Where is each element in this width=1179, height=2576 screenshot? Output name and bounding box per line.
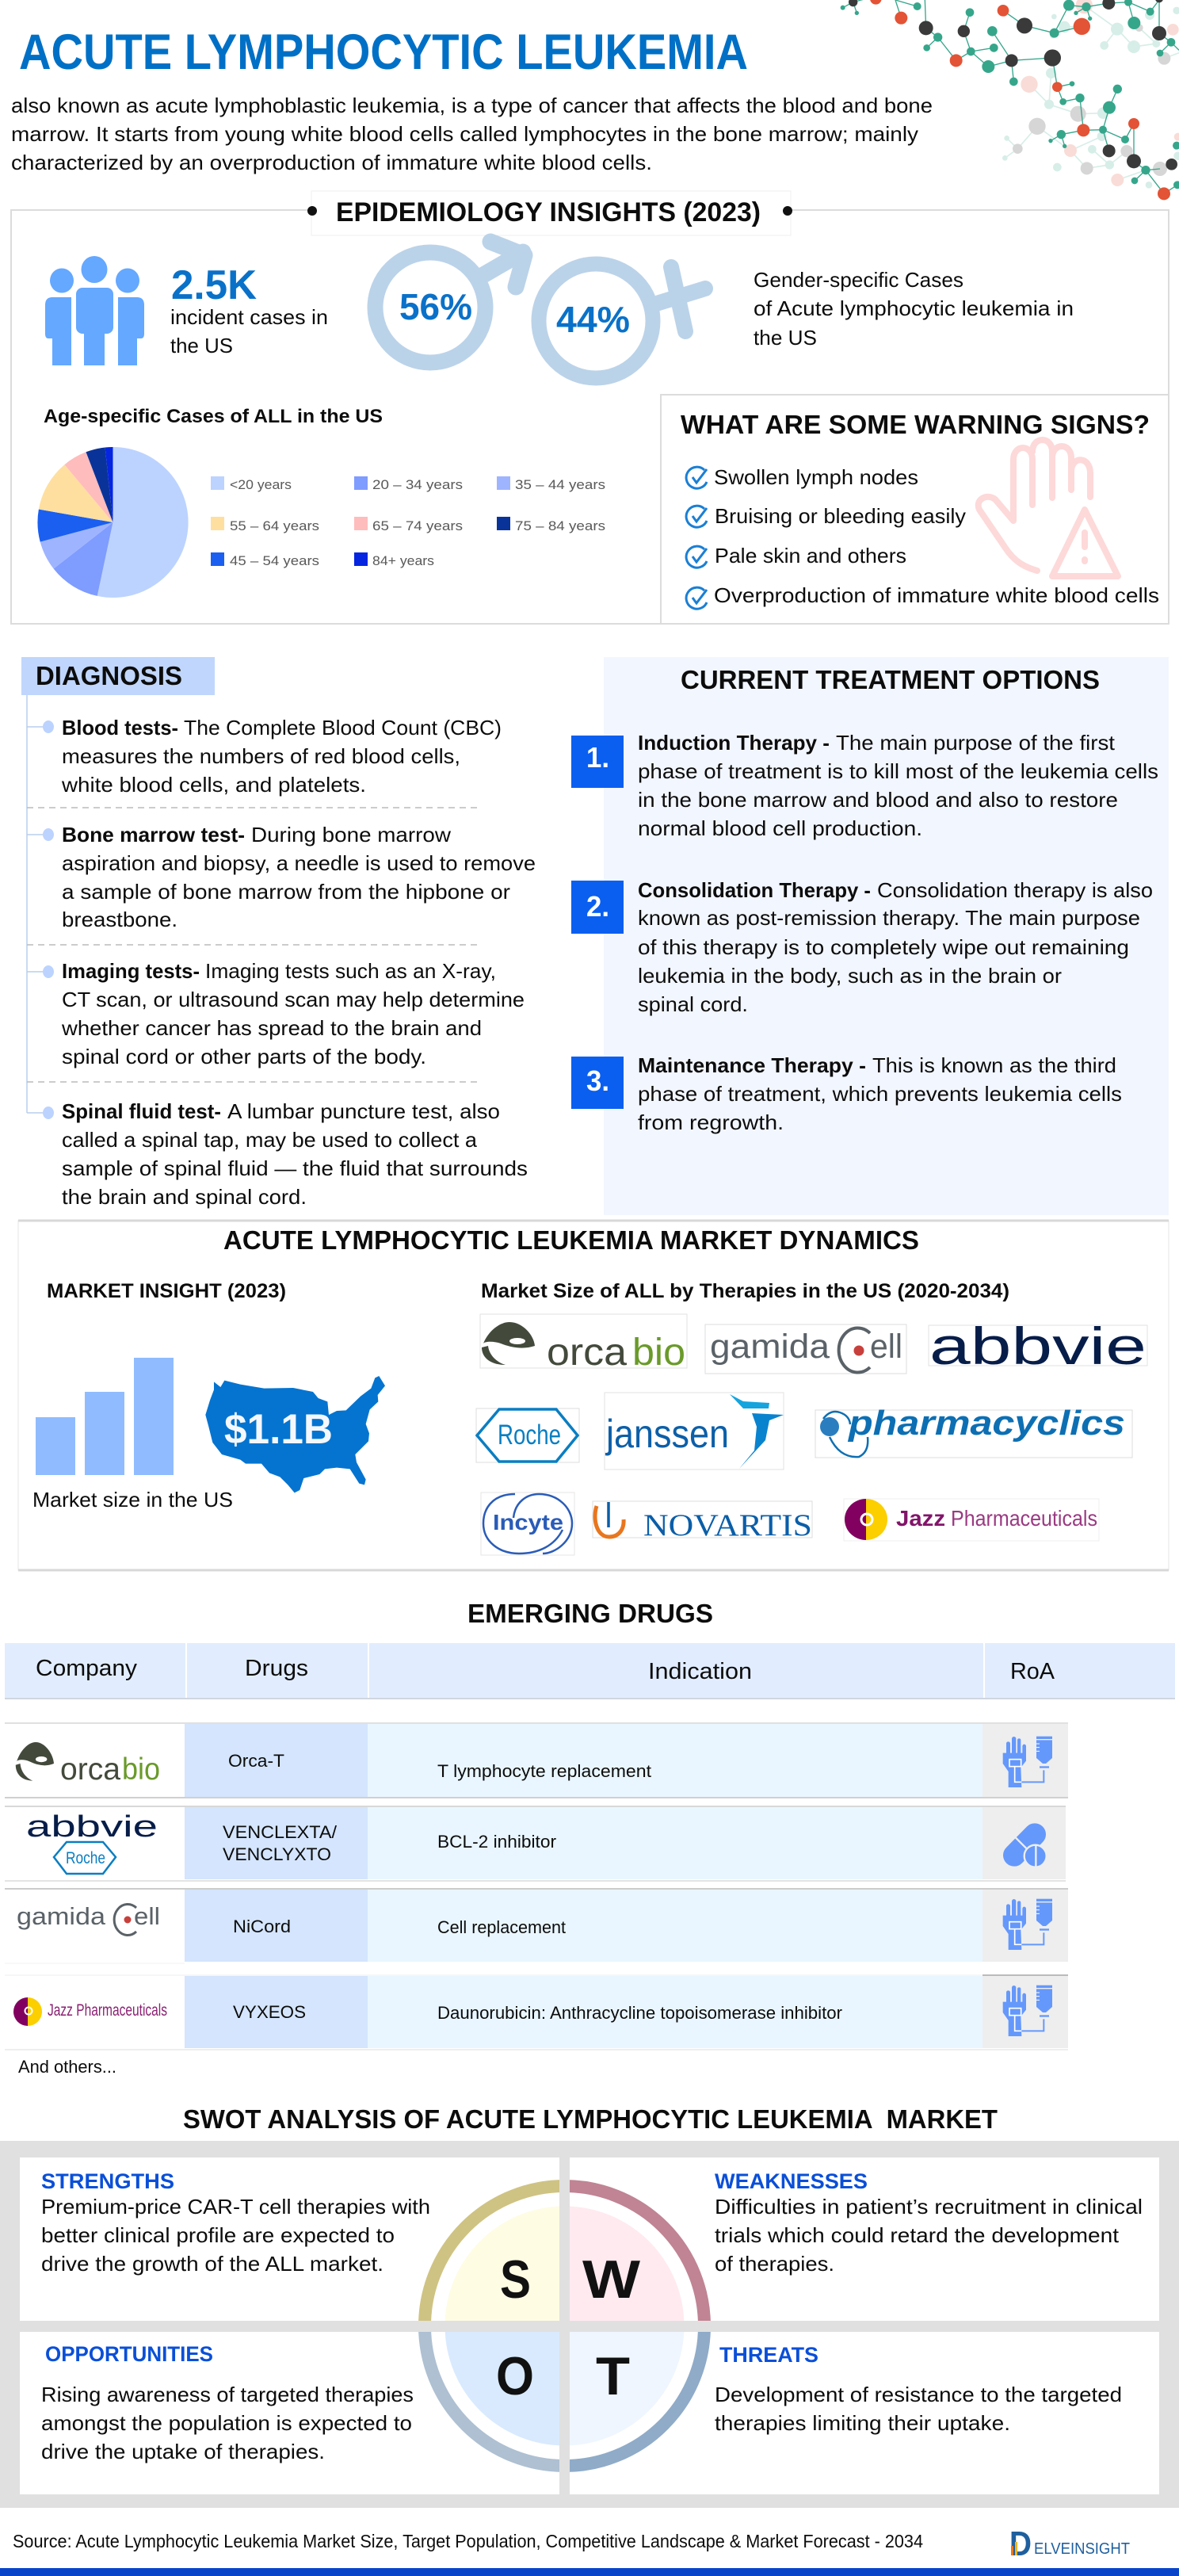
pie chart legend: 55 – 64 years [230, 518, 319, 533]
diagnosis: imaging tests: CT scan, or ultrasound scan may help determine [62, 988, 525, 1011]
pie chart legend: 65 – 74 years [372, 518, 463, 533]
warning sign list: Bruising or bleeding easily [715, 504, 966, 528]
logo: novartis: NOVARTIS [643, 1508, 812, 1542]
SWOT: opportunities: OPPORTUNITIES [45, 2342, 213, 2366]
SWOT circle diagram: T [596, 2346, 630, 2406]
diagnosis: blood tests [61, 716, 502, 797]
table row: nicord [5, 1889, 1068, 1963]
treatment 3: maintenance: 3. [586, 1064, 609, 1097]
icon: pills [1014, 1834, 1047, 1867]
treatment 2: consolidation: 2. [586, 890, 609, 923]
treatment heading: CURRENT TREATMENT OPTIONS [681, 665, 1100, 694]
diagnosis: spinal fluid test: sample of spinal fluid — the fluid that surrounds [62, 1156, 528, 1180]
table header row: Drugs [245, 1656, 308, 1681]
intro text: characterized by an overproduction of immature white blood cells. [11, 151, 652, 174]
logo: jazz pharmaceuticals small [13, 1997, 167, 2026]
treatment 2: consolidation: spinal cord. [638, 992, 748, 1016]
SWOT: opportunities: drive the uptake of therapies. [41, 2440, 325, 2463]
intro text: marrow. It starts from young white blood cells called lymphocytes in the bone marrow; mainly [11, 122, 918, 146]
therapies heading: Market Size of ALL by Therapies in the US (2020-2034) [481, 1280, 1009, 1302]
stat: incident cases [170, 262, 328, 357]
source note: Source: Acute Lymphocytic Leukemia Market Size, Target Population, Competitive Landscape & Market Forecast - 2034 [13, 2531, 923, 2551]
treatment 1: induction: The main purpose of the first [836, 731, 1116, 755]
table row: venclexta: VENCLEXTA/ [223, 1822, 338, 1842]
SWOT: opportunities: Rising awareness of targeted therapies [41, 2383, 414, 2406]
and others note: And others... [18, 2057, 116, 2077]
diagnosis: bone marrow test: During bone marrow [251, 823, 451, 847]
epidemiology heading: EPIDEMIOLOGY INSIGHTS (2023) [336, 197, 761, 227]
diagnosis: imaging tests: Imaging tests such as an X-ray, [205, 959, 496, 983]
panel: SWOT [0, 2141, 1179, 2508]
SWOT: strengths: STRENGTHS [41, 2169, 174, 2193]
diagnosis: imaging tests: whether cancer has spread to the brain and [61, 1016, 482, 1040]
SWOT: weaknesses: trials which could retard the development [715, 2223, 1120, 2247]
logo: roche: Roche [498, 1420, 561, 1450]
panel: diagnosis [21, 657, 536, 1209]
table row: orca-t [5, 1723, 1068, 1798]
diagnosis: spinal fluid test: A lumbar puncture test, also [227, 1099, 500, 1123]
treatment 3: maintenance: from regrowth. [638, 1110, 784, 1134]
SWOT: weaknesses [715, 2169, 1143, 2276]
diagnosis: spinal fluid test: called a spinal tap, may be used to collect a [62, 1128, 478, 1152]
icon: IV infusion [1003, 1737, 1052, 1787]
logo: abbvie: abbvie [929, 1317, 1147, 1375]
US map with market value [205, 1376, 385, 1492]
stat: incident cases: 2.5K [171, 262, 257, 308]
market insight heading: MARKET INSIGHT (2023) [47, 1280, 286, 1302]
logo: orcabio [480, 1314, 687, 1374]
market dynamics heading: ACUTE LYMPHOCYTIC LEUKEMIA MARKET DYNAMICS [223, 1225, 919, 1255]
pie chart legend: 20 – 34 years [372, 477, 463, 492]
SWOT circle diagram: W [582, 2249, 641, 2310]
heading: emerging drugs: EMERGING DRUGS [467, 1599, 713, 1628]
diagnosis: spinal fluid test: Spinal fluid test- [62, 1099, 221, 1123]
diagnosis: blood tests: white blood cells, and platelets. [61, 773, 366, 797]
table row: vyxeos [5, 1975, 1068, 2050]
treatment 2: consolidation: Consolidation Therapy - [638, 878, 871, 902]
table header row: Company [36, 1656, 138, 1681]
logo: pharmacyclics: pharmacyclics [848, 1404, 1125, 1443]
diagnosis: bone marrow test: Bone marrow test- [62, 823, 245, 847]
logo: orcabio small: bio [122, 1752, 160, 1787]
logo: janssen [605, 1393, 784, 1470]
logo: orcabio: bio [632, 1332, 685, 1374]
warning sign list: Pale skin and others [715, 544, 906, 568]
pie chart legend: 84+ years [372, 553, 434, 568]
age chart heading: Age-specific Cases of ALL in the US [44, 406, 383, 427]
logo: orcabio small [16, 1742, 160, 1787]
table row: vyxeos: Daunorubicin: Anthracycline topoisomerase inhibitor [437, 2003, 842, 2023]
table header row: RoA [1010, 1659, 1055, 1684]
treatment 1: induction: phase of treatment is to kill most of the leukemia cells [638, 759, 1158, 783]
SWOT: opportunities: amongst the population is expected to [41, 2411, 412, 2435]
icon: female symbol 44% [539, 264, 705, 378]
market size caption: Market size in the US [32, 1488, 233, 1512]
logo: incyte: Incyte [493, 1510, 563, 1535]
SWOT: strengths: drive the growth of the ALL market. [41, 2252, 383, 2276]
warning sign list [686, 465, 1159, 609]
warning signs heading: WHAT ARE SOME WARNING SIGNS? [681, 410, 1150, 439]
SWOT circle diagram: S [500, 2249, 531, 2310]
table: emerging drugs [5, 1641, 1175, 2050]
treatment 1: induction: 1. [586, 741, 609, 774]
diagnosis: bone marrow test [62, 823, 536, 931]
title: ACUTE LYMPHOCYTIC LEUKEMIA [19, 25, 748, 80]
diagnosis: blood tests: The Complete Blood Count (CBC) [184, 716, 502, 740]
panel: epidemiology insights [11, 191, 1169, 624]
pie chart legend: <20 years [230, 477, 292, 492]
icon: female symbol 44%: 44% [556, 299, 630, 340]
decorative molecule network [841, 0, 1179, 200]
diagnosis heading [21, 657, 215, 695]
diagnosis: imaging tests [61, 959, 525, 1068]
table row: orca-t: T lymphocyte replacement [437, 1761, 651, 1781]
SWOT: weaknesses: of therapies. [715, 2252, 834, 2276]
table row: orca-t: Orca-T [228, 1751, 284, 1771]
diagnosis: imaging tests: spinal cord or other parts of the body. [62, 1045, 426, 1068]
SWOT circle diagram [0, 2157, 1179, 2494]
stat: incident cases: the US [170, 334, 233, 357]
SWOT: strengths: better clinical profile are expected to [41, 2223, 395, 2247]
SWOT: opportunities [41, 2342, 414, 2463]
diagnosis: blood tests: Blood tests- [62, 716, 178, 740]
diagnosis: blood tests: measures the numbers of red blood cells, [62, 744, 460, 768]
treatment 1: induction: Induction Therapy - [638, 731, 830, 755]
logo: pharmacyclics [815, 1404, 1132, 1458]
icon: IV infusion [1003, 1986, 1052, 2036]
footer bar [0, 2568, 1179, 2576]
logo: jazz pharmaceuticals small: Jazz Pharmaceuticals [48, 2001, 167, 2020]
diagnosis heading: DIAGNOSIS [36, 661, 182, 690]
logo: jazz pharmaceuticals: Pharmaceuticals [951, 1506, 1097, 1531]
intro text [11, 94, 933, 174]
diagnosis: bone marrow test: a sample of bone marrow from the hipbone or [62, 880, 510, 904]
gender-specific caption: Gender-specific Cases [754, 268, 963, 292]
table row: nicord: Cell replacement [437, 1917, 566, 1937]
logo: gamida cell [705, 1324, 906, 1374]
logo: roche small [54, 1842, 116, 1874]
US map with market value: $1.1B [224, 1406, 333, 1453]
heading: SWOT analysis: SWOT ANALYSIS OF ACUTE LYMPHOCYTIC LEUKEMIA MARKET [183, 2104, 998, 2134]
SWOT: weaknesses: Difficulties in patient’s recruitment in clinical [715, 2195, 1143, 2219]
treatment 3: maintenance: Maintenance Therapy - [638, 1053, 866, 1077]
icon: bar chart [36, 1358, 174, 1475]
diagnosis: bone marrow test: breastbone. [62, 908, 177, 931]
logo: gamida cell small [17, 1902, 160, 1936]
pie chart legend [211, 476, 605, 568]
table row: venclexta: VENCLYXTO [223, 1844, 331, 1864]
SWOT: threats: THREATS [719, 2343, 818, 2367]
table header row: Indication [648, 1659, 752, 1684]
treatment 3: maintenance: This is known as the third [872, 1053, 1116, 1077]
diagnosis: imaging tests: Imaging tests- [62, 959, 200, 983]
logo: orcabio: orca [547, 1332, 627, 1374]
logo: gamida cell: ell [870, 1328, 902, 1366]
intro text: also known as acute lymphoblastic leukemia, is a type of cancer that affects the blood and bone [11, 94, 933, 117]
logo: abbvie small: abbvie [26, 1810, 158, 1844]
logo: gamida cell small: gamida [17, 1902, 106, 1930]
treatment 1: induction: in the bone marrow and blood and also to restore [638, 788, 1118, 812]
logo: DelveInsight [1009, 2524, 1130, 2563]
logo: jazz pharmaceuticals [844, 1499, 1099, 1541]
table row: nicord: NiCord [233, 1917, 291, 1936]
treatment 2: consolidation: Consolidation therapy is also [877, 878, 1153, 902]
treatment 2: consolidation: known as post-remission therapy. The main purpose [638, 906, 1140, 930]
epidemiology heading [307, 191, 792, 235]
pie chart legend: 45 – 54 years [230, 553, 319, 568]
gender-specific caption [754, 268, 1074, 350]
table header row [5, 1641, 1175, 1699]
SWOT circle diagram: O [496, 2346, 534, 2406]
pie chart legend: 75 – 84 years [515, 518, 605, 533]
logo: orcabio small: orca [60, 1752, 120, 1787]
pie chart legend: 35 – 44 years [515, 477, 605, 492]
gender-specific caption: of Acute lymphocytic leukemia in [754, 296, 1074, 320]
icon: male symbol 56% [376, 242, 525, 363]
SWOT: threats: therapies limiting their uptake. [715, 2411, 1010, 2435]
logo: DelveInsight: ELVEINSIGHT [1034, 2540, 1130, 2558]
logo: roche [476, 1408, 579, 1462]
icon: hand and warning triangle [979, 440, 1118, 576]
warning sign list: Overproduction of immature white blood cells [714, 583, 1159, 607]
SWOT: weaknesses: WEAKNESSES [715, 2169, 868, 2193]
treatment 3: maintenance: phase of treatment, which prevents leukemia cells [638, 1082, 1122, 1106]
logo: jazz pharmaceuticals: Jazz [896, 1506, 945, 1531]
diagnosis: bone marrow test: aspiration and biopsy, a needle is used to remove [62, 851, 536, 875]
logo: gamida cell: gamida [710, 1328, 830, 1366]
pie chart: age-specific cases [37, 447, 189, 598]
panel: warning signs [661, 395, 1169, 624]
logo: roche small: Roche [66, 1849, 105, 1867]
table row: vyxeos: VYXEOS [233, 2002, 306, 2022]
panel: current treatment options [571, 657, 1169, 1215]
logo: novartis [593, 1501, 812, 1542]
treatment 1: induction: normal blood cell production. [638, 816, 922, 840]
icon: IV infusion [1003, 1899, 1052, 1950]
treatment 3: maintenance [571, 1053, 1122, 1134]
SWOT: threats: Development of resistance to the targeted [715, 2383, 1122, 2406]
SWOT: strengths: Premium-price CAR-T cell therapies with [41, 2195, 430, 2219]
logo: DelveInsight: D [1009, 2524, 1032, 2563]
warning sign list: Swollen lymph nodes [714, 465, 918, 489]
stat: incident cases: incident cases in [170, 305, 328, 329]
SWOT: threats [715, 2343, 1122, 2435]
diagnosis: spinal fluid test [62, 1099, 528, 1209]
treatment 2: consolidation: leukemia in the body, such as in the brain or [638, 964, 1062, 988]
logo: incyte [481, 1492, 574, 1555]
treatment 1: induction [571, 731, 1158, 840]
table row: venclexta: BCL-2 inhibitor [437, 1832, 556, 1852]
panel: market dynamics [18, 1221, 1169, 1570]
logo: gamida cell small: ell [134, 1902, 160, 1930]
table row: venclexta [5, 1806, 1066, 1881]
icon: male symbol 56%: 56% [399, 286, 472, 327]
gender-specific caption: the US [754, 326, 817, 350]
SWOT: strengths [41, 2169, 430, 2276]
icon: people [45, 256, 144, 365]
treatment 2: consolidation [571, 878, 1153, 1016]
diagnosis: spinal fluid test: the brain and spinal cord. [62, 1185, 307, 1209]
logo: janssen: janssen [605, 1412, 729, 1456]
timeline connector [27, 695, 481, 1119]
treatment 2: consolidation: of this therapy is to completely wipe out remaining [638, 935, 1129, 959]
